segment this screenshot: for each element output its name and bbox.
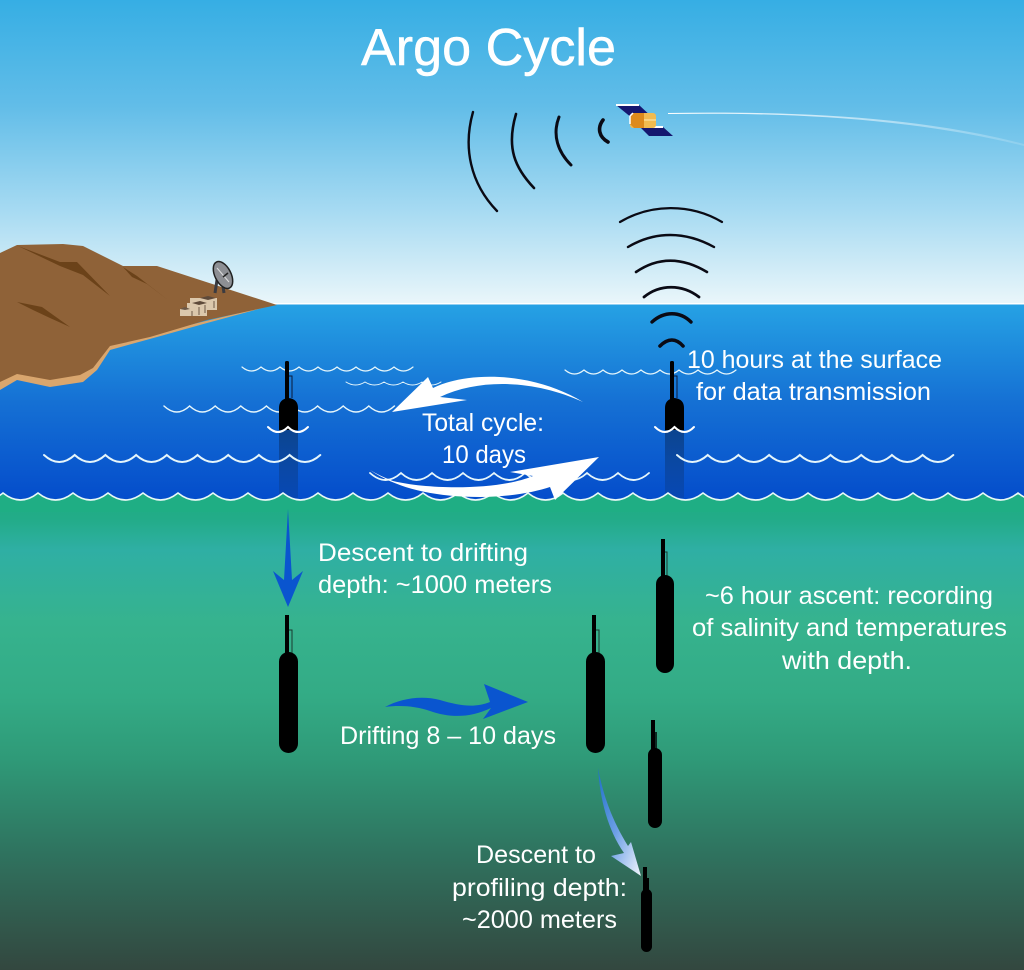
wave lines — [44, 367, 953, 480]
float ascending, lower — [648, 720, 662, 828]
label: with depth: with depth. — [781, 647, 912, 675]
satellite data trail — [668, 113, 1024, 146]
cycle arrow: top, pointing left — [392, 377, 583, 412]
label: descent depth: depth: ~1000 meters — [318, 571, 552, 599]
label: total cycle duration: 10 days — [442, 441, 526, 469]
float at surface, right — [655, 361, 694, 432]
label: hours at the surface: 10 hours at the surface — [687, 346, 942, 374]
float ascending, upper — [656, 539, 674, 673]
arrow: descent to profiling depth — [598, 768, 641, 876]
horizon line — [270, 303, 1024, 304]
float at surface, left — [268, 361, 308, 432]
arrow: descent to drifting depth — [273, 509, 303, 607]
label: drifting duration: Drifting 8 – 10 days — [340, 722, 556, 750]
label: profiling depth value: ~2000 meters — [462, 906, 617, 934]
label: salinity and temperature: of salinity and temperatures — [692, 614, 1007, 642]
float at profiling depth — [641, 867, 652, 952]
label: descent to drifting depth: Descent to drifting — [318, 539, 528, 567]
label: descent to: Descent to — [476, 841, 596, 869]
submerged float shadows — [279, 428, 684, 498]
title: Argo Cycle — [361, 19, 616, 77]
satellite dish — [209, 258, 237, 293]
cycle arrow: bottom, pointing right — [370, 457, 599, 500]
float at drifting depth, left — [279, 615, 298, 753]
land: headland — [0, 244, 277, 390]
signal arcs from satellite — [469, 112, 608, 211]
label: ascent recording: ~6 hour ascent: recording — [705, 582, 993, 610]
ground station buildings — [180, 296, 217, 316]
surface wave band — [0, 492, 1024, 512]
deep ocean layer — [0, 500, 1024, 970]
signal arcs from float — [620, 208, 722, 346]
sky background — [0, 0, 1024, 304]
ocean surface layer — [0, 304, 1024, 502]
float at drifting depth, right — [586, 615, 605, 753]
satellite — [616, 104, 673, 136]
label: total cycle: Total cycle: — [422, 409, 544, 437]
label: profiling depth: profiling depth: — [452, 874, 627, 902]
label: data transmission: for data transmission — [696, 378, 931, 406]
arrow: drifting — [385, 684, 528, 719]
